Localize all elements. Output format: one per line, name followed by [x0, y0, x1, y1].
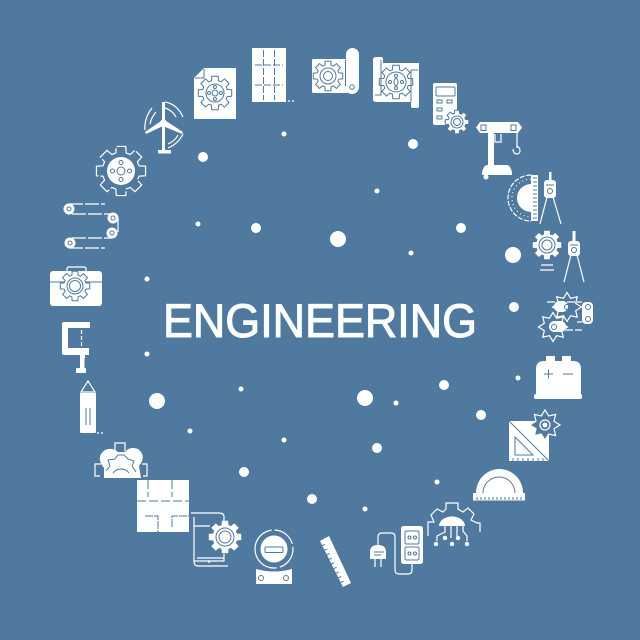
icon: document with gear	[194, 68, 236, 119]
icon: gantry crane	[476, 122, 522, 180]
icon: phone with gear	[191, 513, 241, 566]
icon: rolled blueprint with gear	[312, 48, 359, 94]
icon: blueprint sheet	[252, 48, 296, 102]
icon: gauge meter	[255, 530, 293, 584]
icon: plug and socket	[370, 526, 423, 574]
icon: gear and compass	[533, 231, 584, 282]
icon: car battery	[534, 356, 582, 399]
icon: conveyor with star gears	[538, 292, 593, 342]
icon: pencil	[80, 381, 103, 433]
icon: ruler	[320, 536, 351, 587]
icon: gear circuit	[428, 503, 480, 546]
scattered dots	[144, 132, 521, 512]
icon: open blueprint with gear	[373, 57, 419, 108]
icon: floor plan	[137, 480, 190, 532]
icon: belt pulleys	[64, 204, 118, 248]
icon: protractor	[473, 469, 525, 500]
title: ENGINEERING	[163, 294, 477, 347]
icon: large gear	[96, 146, 146, 196]
icon: calculator with gear	[433, 83, 469, 134]
icon: protractor and compass	[508, 172, 561, 224]
icon: toolbox with gear	[50, 267, 102, 306]
icon: half gear	[95, 443, 147, 478]
icon: c-clamp	[62, 322, 90, 373]
icon: wind turbine	[145, 102, 183, 154]
icon: set square with star gear	[509, 410, 560, 461]
